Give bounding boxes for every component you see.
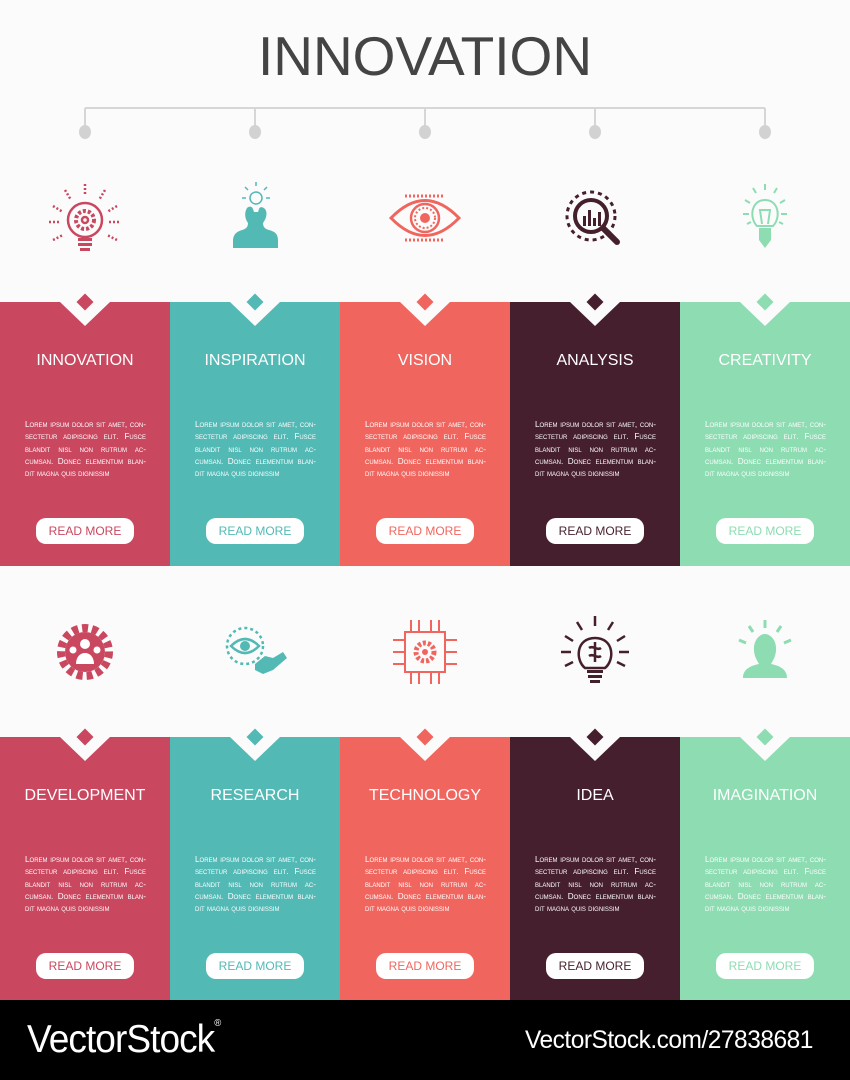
panel: idea: dit magna quis dignissim: [535, 904, 620, 913]
panel: research: RESEARCH: [211, 787, 299, 804]
panel: analysis: ANALYSIS: [556, 352, 634, 369]
panel: analysis: Lorem ipsum dolor sit amet, con-: [535, 420, 656, 429]
panel: technology: sectetur adipiscing elit. Fusce: [365, 867, 486, 876]
panel: creativity: blandit nisl non rutrum ac-: [705, 445, 826, 454]
panel: inspiration: READ MORE: [219, 524, 291, 538]
icon: lightbulb gear: [49, 184, 119, 251]
footer: [0, 1000, 850, 1080]
panel: inspiration: INSPIRATION: [204, 352, 306, 369]
panel: innovation: [0, 302, 170, 566]
panel: vision: Lorem ipsum dolor sit amet, con-: [365, 420, 486, 429]
panel: creativity: Lorem ipsum dolor sit amet, con-: [705, 420, 826, 429]
panel: vision: [340, 302, 510, 566]
panel: innovation: sectetur adipiscing elit. Fusce: [25, 432, 146, 441]
panel: vision: READ MORE: [389, 524, 461, 538]
icon: chip gear: [393, 620, 457, 684]
panel: technology: READ MORE: [389, 959, 461, 973]
panel: imagination: cumsan. Donec elementum blan-: [705, 892, 826, 901]
panel: inspiration: blandit nisl non rutrum ac-: [195, 445, 316, 454]
panel: development: DEVELOPMENT: [25, 787, 145, 804]
footer url: VectorStock.com/27838681: [525, 1026, 813, 1054]
icon: team gear: [57, 624, 113, 680]
panel: imagination: [680, 737, 850, 1001]
panel: development: Lorem ipsum dolor sit amet, con-: [25, 855, 146, 864]
panel: imagination: Lorem ipsum dolor sit amet, con-: [705, 855, 826, 864]
panel: inspiration: Lorem ipsum dolor sit amet, con-: [195, 420, 316, 429]
panel: inspiration: dit magna quis dignissim: [195, 469, 280, 478]
panel: research: READ MORE: [219, 959, 291, 973]
panel: research: dit magna quis dignissim: [195, 904, 280, 913]
panel: vision: cumsan. Donec elementum blan-: [365, 457, 486, 466]
panel: creativity: cumsan. Donec elementum blan-: [705, 457, 826, 466]
panel: innovation: Lorem ipsum dolor sit amet, con-: [25, 420, 146, 429]
panel: development: sectetur adipiscing elit. Fusce: [25, 867, 146, 876]
icon: bulb pencil: [743, 184, 787, 248]
panel: creativity: [680, 302, 850, 566]
panel: analysis: [510, 302, 680, 566]
panel: imagination: sectetur adipiscing elit. Fusce: [705, 867, 826, 876]
panel: innovation: READ MORE: [49, 524, 121, 538]
panel: idea: [510, 737, 680, 1001]
panel: innovation: cumsan. Donec elementum blan-: [25, 457, 146, 466]
icon: head with bulb: [233, 182, 278, 248]
panel: technology: Lorem ipsum dolor sit amet, con-: [365, 855, 486, 864]
panel: imagination: IMAGINATION: [713, 787, 817, 804]
panel: research: cumsan. Donec elementum blan-: [195, 892, 316, 901]
panel: technology: dit magna quis dignissim: [365, 904, 450, 913]
icon: eye handshake: [226, 626, 287, 674]
panel: development: blandit nisl non rutrum ac-: [25, 880, 146, 889]
panel: creativity: CREATIVITY: [718, 352, 812, 369]
title: INNOVATION: [258, 25, 592, 87]
panel: vision: sectetur adipiscing elit. Fusce: [365, 432, 486, 441]
panel: research: Lorem ipsum dolor sit amet, con-: [195, 855, 316, 864]
panel: imagination: dit magna quis dignissim: [705, 904, 790, 913]
panel: research: sectetur adipiscing elit. Fusce: [195, 867, 316, 876]
panel: idea: cumsan. Donec elementum blan-: [535, 892, 656, 901]
panel: analysis: cumsan. Donec elementum blan-: [535, 457, 656, 466]
panel: vision: dit magna quis dignissim: [365, 469, 450, 478]
panel: idea: IDEA: [576, 787, 614, 804]
panel: vision: VISION: [398, 352, 452, 369]
panel: creativity: READ MORE: [729, 524, 801, 538]
panel: analysis: blandit nisl non rutrum ac-: [535, 445, 656, 454]
panel: creativity: dit magna quis dignissim: [705, 469, 790, 478]
panel: imagination: blandit nisl non rutrum ac-: [705, 880, 826, 889]
panel: technology: blandit nisl non rutrum ac-: [365, 880, 486, 889]
icon: eye: [389, 194, 461, 242]
panel: inspiration: [170, 302, 340, 566]
panel: imagination: READ MORE: [729, 959, 801, 973]
icon: magnifier chart: [566, 190, 620, 245]
panel: vision: blandit nisl non rutrum ac-: [365, 445, 486, 454]
panel: idea: blandit nisl non rutrum ac-: [535, 880, 656, 889]
panel: technology: cumsan. Donec elementum blan-: [365, 892, 486, 901]
panel: inspiration: cumsan. Donec elementum blan-: [195, 457, 316, 466]
panel: idea: READ MORE: [559, 959, 631, 973]
panel: innovation: INNOVATION: [36, 352, 134, 369]
panel: analysis: READ MORE: [559, 524, 631, 538]
footer logo: VectorStock®: [27, 1018, 220, 1061]
panel: analysis: sectetur adipiscing elit. Fusce: [535, 432, 656, 441]
panel: innovation: blandit nisl non rutrum ac-: [25, 445, 146, 454]
connector tree: [79, 107, 771, 139]
panel: research: blandit nisl non rutrum ac-: [195, 880, 316, 889]
panel: idea: Lorem ipsum dolor sit amet, con-: [535, 855, 656, 864]
panel: inspiration: sectetur adipiscing elit. Fusce: [195, 432, 316, 441]
panel: analysis: dit magna quis dignissim: [535, 469, 620, 478]
panel: innovation: dit magna quis dignissim: [25, 469, 110, 478]
panel: technology: TECHNOLOGY: [369, 787, 481, 804]
panel: creativity: sectetur adipiscing elit. Fusce: [705, 432, 826, 441]
panel: idea: sectetur adipiscing elit. Fusce: [535, 867, 656, 876]
icon: person rays: [738, 620, 792, 678]
panel: development: dit magna quis dignissim: [25, 904, 110, 913]
panel: development: [0, 737, 170, 1001]
icon: brain bulb: [561, 616, 629, 683]
panel: development: cumsan. Donec elementum blan-: [25, 892, 146, 901]
panel: technology: [340, 737, 510, 1001]
panel: development: READ MORE: [49, 959, 121, 973]
panel: research: [170, 737, 340, 1001]
